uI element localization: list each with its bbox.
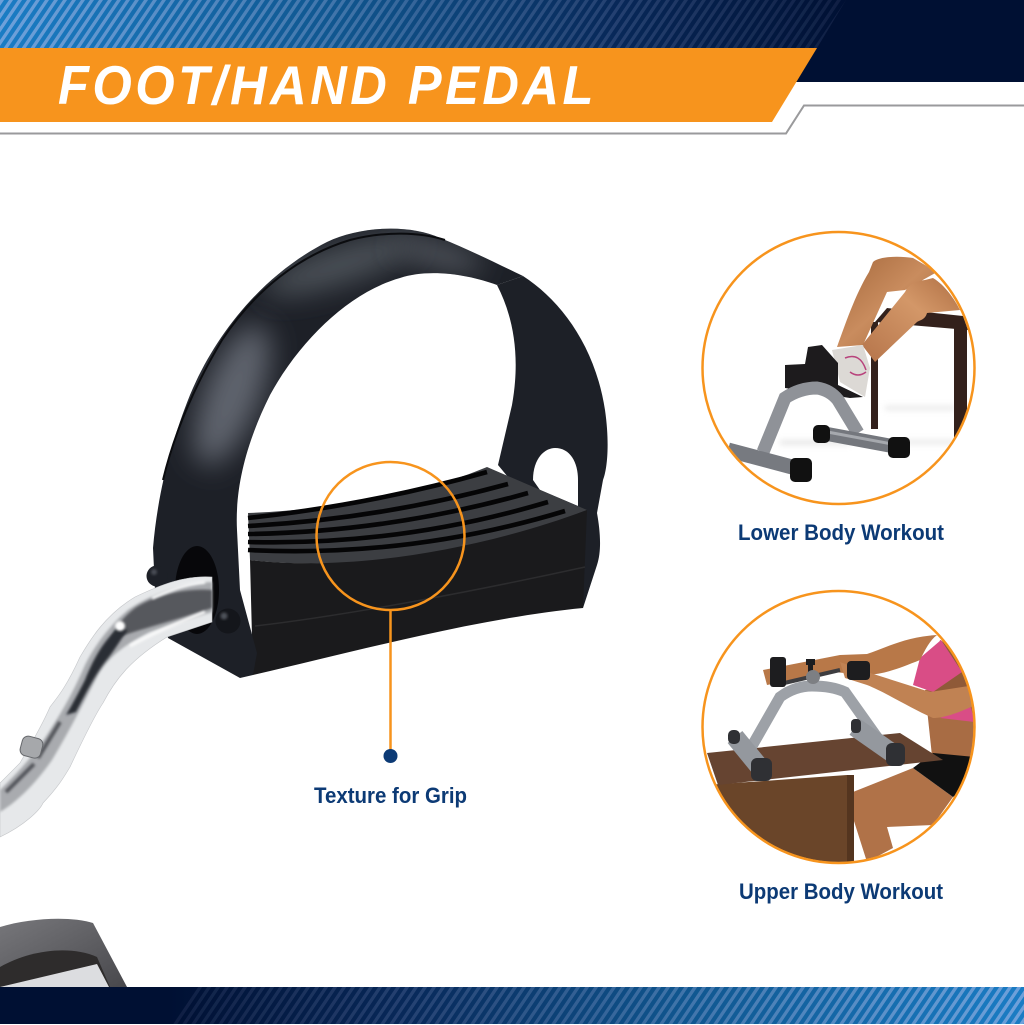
front rivet: [216, 608, 240, 634]
callout ring: [316, 462, 464, 610]
chrome midband: [0, 582, 212, 812]
label: upper body workout: Upper Body Workout: [739, 879, 944, 904]
header navy block: [0, 0, 1024, 82]
upper body workout photo: [702, 591, 975, 870]
front leg: [862, 278, 960, 362]
rear caps: [813, 425, 910, 458]
rear rivet: [146, 566, 168, 586]
product photo: pedal with strap and crank arm: [0, 220, 608, 837]
ring: [702, 232, 974, 504]
cabinet: [716, 775, 847, 862]
dark speckled section: [110, 590, 212, 640]
floor shadows: [780, 406, 955, 445]
header grey outline: [0, 106, 1024, 134]
front cap: [790, 458, 812, 482]
rear tube highlight: [830, 431, 888, 445]
right caps: [851, 719, 905, 766]
pedal block front: [250, 510, 587, 675]
scene: seated legs on pedal exerciser: [728, 257, 968, 482]
exerciser arch: [763, 388, 858, 452]
crank and hand pedals: [770, 657, 870, 687]
bench: [871, 308, 968, 438]
header white lower strip: [0, 82, 1024, 133]
callout: texture for grip: [314, 462, 467, 808]
ring: [702, 591, 974, 863]
pedal block seam: [255, 567, 585, 626]
foot pedals: [785, 345, 863, 398]
tube body: [0, 577, 212, 837]
console housing: [0, 919, 127, 987]
callout leader line: [389, 610, 392, 750]
pedal grip slots: [248, 472, 565, 551]
scene: seated person pedalling with hands: [707, 635, 975, 870]
arm bolt: [19, 735, 44, 760]
console screen: [0, 964, 109, 987]
console corner: [0, 919, 127, 987]
header banner: [0, 0, 1024, 134]
front strap: [153, 228, 523, 678]
back strap: [497, 276, 608, 608]
footer gradient: [0, 987, 1024, 1024]
strap edge line: [163, 234, 445, 480]
thighs: [853, 768, 953, 862]
title: FOOT/HAND PEDAL: [58, 55, 593, 116]
chest: [930, 640, 967, 692]
top lower band: [940, 707, 974, 722]
shoe: [832, 345, 870, 397]
lower chrome streaks: [6, 722, 60, 792]
exerciser arch: [752, 686, 877, 746]
front foot tube: [728, 450, 792, 467]
left roller: [735, 737, 762, 770]
back leg: [837, 257, 937, 347]
top: [913, 640, 962, 692]
top highlight: [152, 582, 205, 598]
callout label: Texture for Grip: [314, 783, 467, 808]
footer stripes: [170, 987, 1024, 1024]
torso: [925, 684, 974, 756]
label: lower body workout: Lower Body Workout: [738, 520, 945, 545]
lower highlight: [130, 612, 205, 646]
table top: [707, 733, 943, 785]
footer band: [0, 987, 1024, 1024]
left caps: [728, 730, 772, 781]
callout dot: [384, 749, 398, 763]
right roller: [855, 727, 895, 755]
lower arm: [840, 662, 975, 718]
lower body workout photo: [702, 232, 974, 504]
dark reflection streak: [66, 628, 128, 715]
rear foot tube: [822, 433, 892, 446]
shorts: [913, 753, 975, 797]
console bezel: [0, 950, 110, 987]
cabinet side: [847, 775, 854, 867]
upper arm: [763, 635, 937, 685]
pedal platform top: [248, 467, 587, 563]
specular spot: [115, 621, 125, 631]
header blue stripe band: [0, 0, 846, 48]
strap slot: [533, 448, 578, 506]
crank arm: [0, 577, 212, 837]
orange title band: [0, 48, 817, 122]
axle hole: [175, 546, 219, 634]
